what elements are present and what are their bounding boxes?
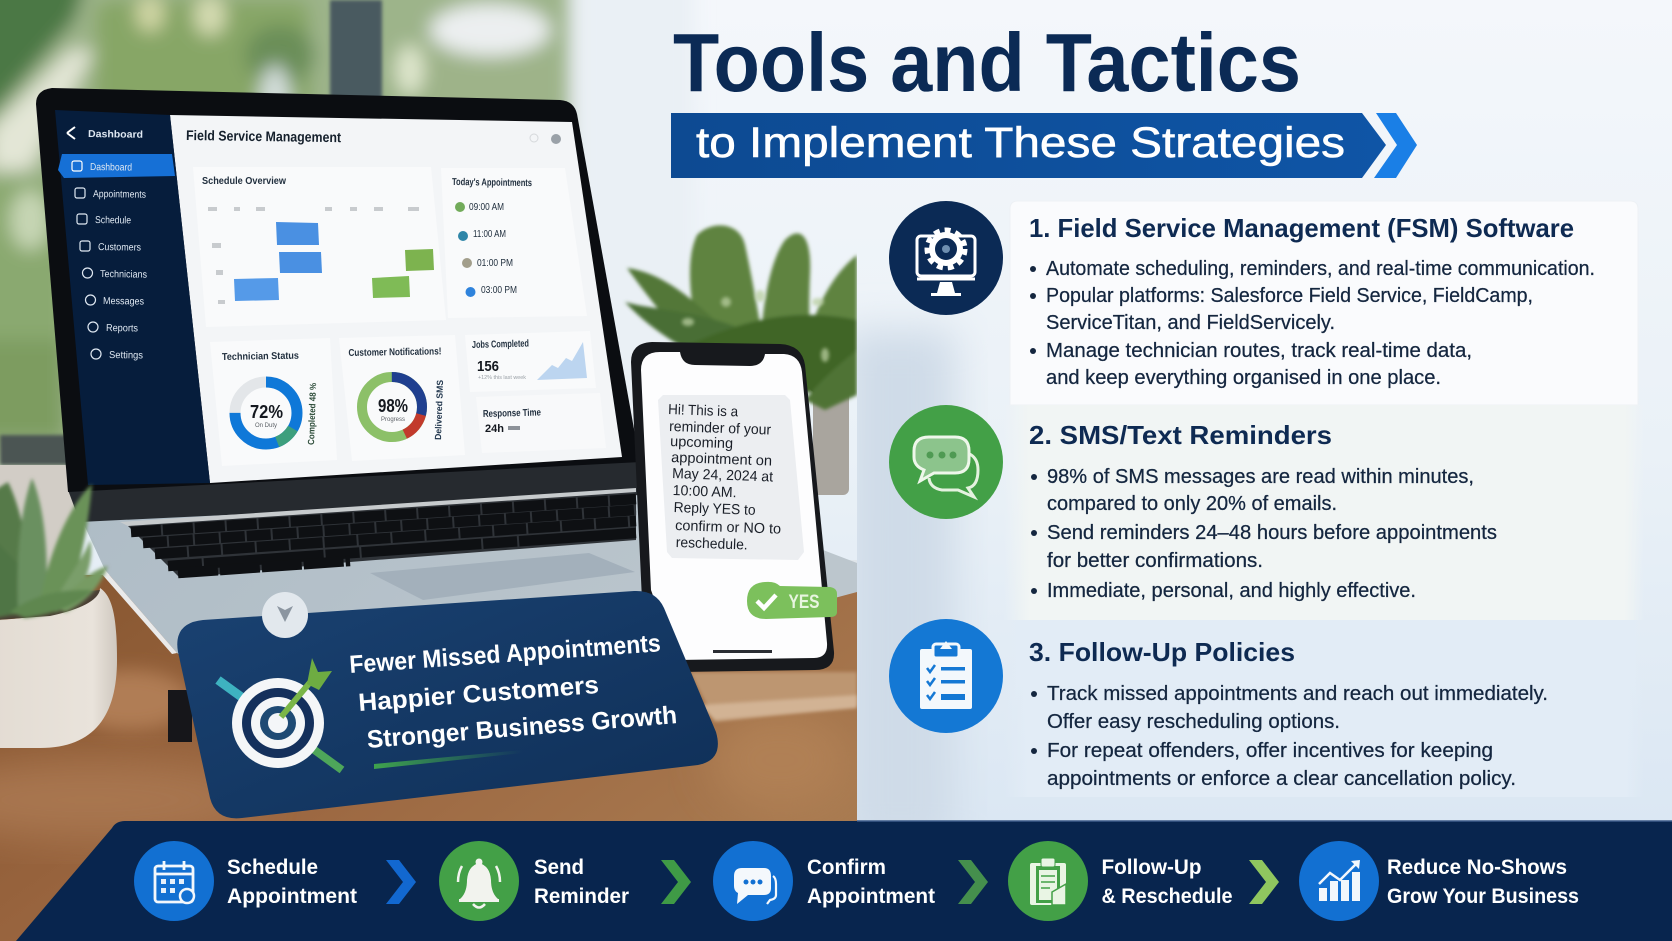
silver surface behind phone: [850, 560, 857, 563]
panel: follow-up policies: [889, 619, 1644, 797]
bullet list: Track missed appointments and reach out immediately.: [1047, 682, 1548, 705]
screen: [170, 115, 622, 483]
placard: business outcomes: [168, 591, 718, 818]
bullet list: Immediate, personal, and highly effective.: [1047, 579, 1416, 602]
bullet list: Offer easy rescheduling options.: [1047, 710, 1340, 733]
bullet list: Send reminders 24–48 hours before appointments: [1047, 521, 1497, 544]
target with arrow icon: [218, 658, 342, 770]
panel: FSM software: [889, 201, 1638, 405]
step: reduce no-shows: Reduce No-Shows: [1387, 855, 1567, 879]
step: send reminder: Send: [534, 855, 584, 879]
card: schedule overview: Schedule Overview: [202, 176, 286, 187]
card: response time: [483, 408, 541, 432]
keyboard deck: [85, 495, 857, 654]
arrow: [1249, 860, 1279, 904]
sidebar navigation: Customers: [98, 242, 141, 254]
bullet list: and keep everything organised in one place.: [1046, 366, 1441, 389]
bullet list: [1030, 257, 1595, 389]
card: today's appointments: Today's Appointments: [452, 177, 532, 189]
card: today's appointments: 11:00 AM: [473, 229, 506, 240]
card: customer notifications with 98% donut: Delivered SMS: [433, 380, 445, 440]
card: response time: Response Time: [483, 407, 541, 420]
keyboard: [128, 492, 636, 578]
card: schedule overview: [202, 176, 434, 304]
icon: chat bubbles: [889, 405, 1003, 519]
wooden table: [0, 575, 857, 941]
sidebar navigation: Settings: [109, 350, 143, 361]
sidebar navigation: [58, 127, 175, 361]
card: customer notifications with 98% donut: 98%: [378, 396, 408, 416]
bullet list: ServiceTitan, and FieldServicely.: [1046, 311, 1335, 334]
card: customer notifications with 98% donut: Progress: [381, 417, 405, 423]
step: confirm appointment: Confirm: [807, 855, 886, 879]
placard text: Stronger Business Growth: [366, 701, 678, 754]
heading: 2. SMS/Text Reminders: [1029, 420, 1332, 450]
right background plant: [625, 225, 857, 495]
heading: 1. Field Service Management (FSM) Software: [1029, 213, 1574, 243]
message text: confirm or NO to: [675, 518, 781, 538]
panel: SMS reminders: [889, 405, 1644, 620]
sidebar navigation: Messages: [103, 296, 144, 308]
card: today's appointments: 09:00 AM: [469, 202, 504, 213]
icon: clipboard checklist: [889, 619, 1003, 733]
card: technician status with 72% donut: On Duty: [255, 423, 277, 429]
message text: Hi! This is a: [668, 402, 739, 420]
card: today's appointments: 03:00 PM: [481, 285, 517, 296]
bullet list: Manage technician routes, track real-time data,: [1046, 339, 1472, 362]
sidebar: [55, 110, 210, 485]
subtitle banner: [671, 113, 1417, 178]
smartphone with SMS reminder: [631, 342, 837, 672]
step: schedule appointment: [134, 841, 357, 921]
step: confirm appointment: Appointment: [807, 884, 935, 908]
card: technician status with 72% donut: [222, 352, 317, 450]
sidebar navigation: Dashboard: [90, 162, 132, 174]
card: jobs completed: 156: [477, 358, 499, 375]
placard text: Happier Customers: [357, 671, 600, 717]
bottom process strip: [16, 821, 1672, 941]
step: follow-up and reschedule: & Reschedule: [1102, 884, 1233, 908]
step: send reminder: Reminder: [534, 884, 630, 908]
step: follow-up and reschedule: [1008, 841, 1233, 921]
bullet list: For repeat offenders, offer incentives for keeping: [1047, 739, 1493, 762]
message text: May 24, 2024 at: [672, 466, 773, 486]
sidebar navigation: Schedule: [95, 215, 131, 227]
card: customer notifications with 98% donut: Customer Notifications!: [348, 346, 442, 359]
arrow: [661, 860, 691, 904]
bullet list: Automate scheduling, reminders, and real-time communication.: [1046, 257, 1595, 280]
sidebar navigation: Appointments: [93, 189, 146, 201]
card: technician status with 72% donut: 72%: [250, 402, 283, 422]
icon: gear on monitor: [889, 201, 1003, 315]
step: schedule appointment: Appointment: [227, 884, 357, 908]
message text: appointment on: [671, 450, 772, 470]
card: today's appointments: [452, 178, 532, 297]
title: Tools and Tactics: [673, 16, 1301, 109]
screen bezel: [36, 88, 640, 492]
photo: desk scene with laptop, phone and plants: [0, 0, 857, 941]
arrow: [958, 860, 988, 904]
subtitle banner: to Implement These Strategies: [696, 119, 1345, 167]
message text: Reply YES to: [673, 500, 756, 519]
step: schedule appointment: Schedule: [227, 855, 318, 879]
placard text: [350, 636, 676, 748]
message text: [668, 402, 781, 554]
heading: 3. Follow-Up Policies: [1029, 637, 1295, 667]
left potted succulent: [0, 478, 117, 748]
message text: upcoming: [670, 434, 733, 452]
placard text: Fewer Missed Appointments: [348, 629, 662, 679]
bullet list: Popular platforms: Salesforce Field Service, FieldCamp,: [1046, 284, 1533, 307]
sidebar navigation: Technicians: [100, 269, 147, 281]
arrow: [386, 860, 416, 904]
card: today's appointments: 01:00 PM: [477, 258, 513, 269]
step: reduce no-shows: Grow Your Business: [1387, 884, 1579, 908]
dashboard header: [186, 130, 561, 144]
bullet list: appointments or enforce a clear cancellation policy.: [1047, 767, 1516, 790]
bullet list: for better confirmations.: [1047, 549, 1263, 572]
card: technician status with 72% donut: Completed 48 %: [306, 383, 318, 445]
trackpad: [370, 553, 635, 600]
bullet list: [1031, 465, 1497, 602]
laptop: [36, 88, 857, 690]
card: technician status with 72% donut: Technician Status: [222, 351, 299, 363]
placard pin: [262, 592, 308, 638]
message text: reschedule.: [675, 535, 748, 554]
bullet list: 98% of SMS messages are read within minutes,: [1047, 465, 1474, 488]
bullet list: [1031, 682, 1548, 790]
step: confirm appointment: [713, 841, 935, 921]
card: jobs completed: [472, 339, 587, 380]
YES reply badge: YES: [788, 592, 820, 613]
card: customer notifications with 98% donut: [348, 348, 444, 442]
sidebar navigation: Dashboard: [88, 129, 143, 141]
bullet list: compared to only 20% of emails.: [1047, 492, 1337, 515]
message text: 10:00 AM.: [672, 483, 737, 501]
message bubble: [658, 395, 804, 560]
card: jobs completed: +12% this last week: [478, 375, 527, 381]
step: reduce no-shows: [1299, 841, 1579, 921]
hinge: [68, 462, 638, 522]
YES reply badge: [747, 582, 837, 619]
card: jobs completed: Jobs Completed: [472, 339, 529, 351]
step: follow-up and reschedule: Follow-Up: [1102, 855, 1202, 879]
sidebar navigation: Reports: [106, 323, 138, 334]
card: response time: 24h: [485, 423, 504, 435]
dashboard header: Field Service Management: [186, 127, 341, 145]
step: send reminder: [439, 841, 630, 921]
message text: reminder of your: [669, 419, 772, 439]
